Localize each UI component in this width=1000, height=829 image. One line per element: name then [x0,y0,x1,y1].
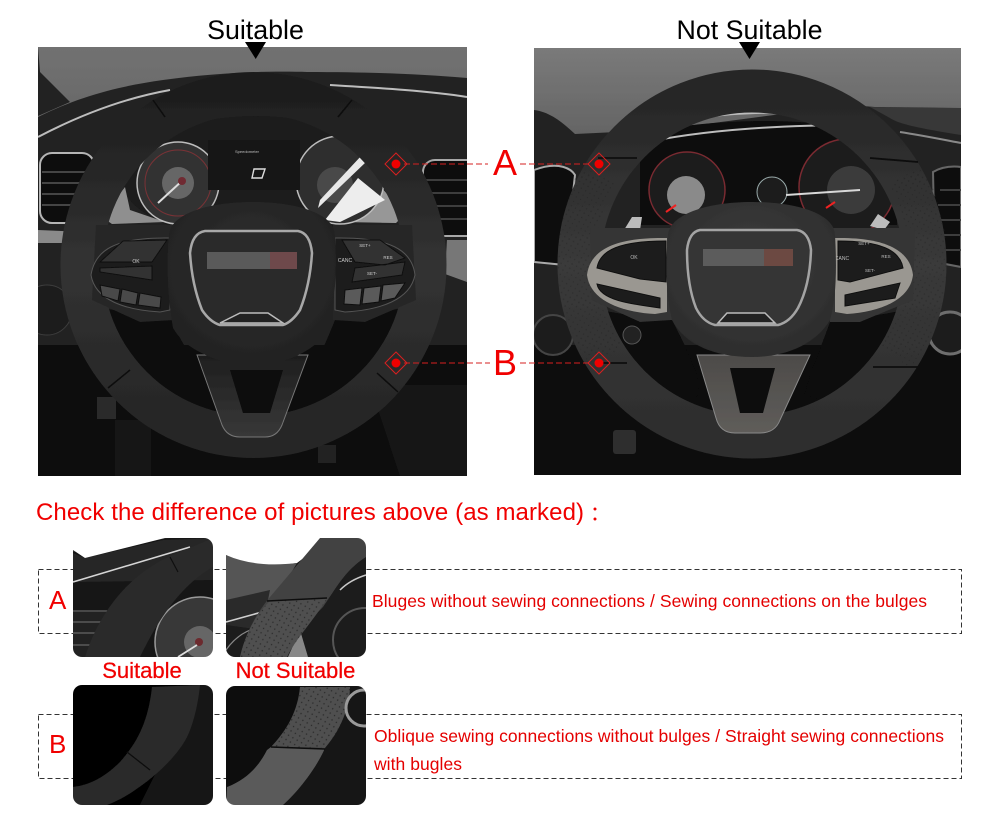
right spoke buttons [335,238,415,312]
footwell openings [600,310,905,401]
right spoke buttons: SET- [367,271,377,276]
row box: A [38,570,962,634]
heading: Suitable: Suitable [207,15,304,45]
airbag hub [666,202,836,357]
right spoke buttons: SET- [865,268,875,273]
left spoke buttons: OK [132,259,140,265]
left spoke buttons [91,238,170,312]
right spoke buttons: SET+ [359,243,371,248]
right spoke buttons: CANC [835,256,849,262]
instruction heading: Check the difference of pictures above (as marked) [36,499,584,526]
digital display [208,150,300,190]
gauge: tachometer [137,142,219,224]
heading: Not Suitable: Not Suitable [677,15,822,45]
badge [687,230,811,325]
panel: suitable steering wheel photo [22,47,483,476]
digital display: Speedometer [235,149,260,154]
left spoke buttons: OK [630,255,638,261]
left spoke buttons [587,238,667,314]
label: B: B [49,729,66,759]
description: row B: Oblique sewing connections without bulges / Straight sewing connections [374,726,944,746]
thumbnail: B suitable [73,685,213,805]
right spoke buttons: RES [383,255,393,260]
right spoke buttons: CANC [338,258,352,264]
callout: marker B connecting both wheels: B [493,342,517,383]
lower spoke [197,355,308,437]
thumbnail: A not suitable [226,538,366,657]
right spoke buttons: RES [881,254,891,259]
callout: marker A connecting both wheels [385,142,610,183]
airbag hub [168,202,336,365]
callout: marker A connecting both wheels: A [493,142,517,183]
gauge: tachometer [649,152,725,228]
instruction heading: ： [590,503,610,525]
right spoke buttons: SET+ [858,241,870,246]
label: A: A [49,585,67,615]
description: row A: Bluges without sewing connections / Sewing connections on the bulges [372,591,927,611]
caption: Not Suitable: Not Suitable [236,658,355,683]
wheel rim [579,91,925,437]
gauge: speedometer [786,139,895,235]
badge [190,231,312,325]
callout: marker B connecting both wheels [385,342,610,383]
row box: B [38,714,962,778]
arrow: Suitable pointer [245,42,266,59]
lower spoke [697,355,810,433]
right spoke buttons [835,238,913,314]
gauge: speedometer [296,136,385,224]
caption: Suitable: Suitable [102,658,182,683]
footwell openings [109,309,398,394]
perforated leather sides [577,175,927,358]
panel: not suitable steering wheel photo [533,48,971,475]
thumbnail: A suitable [73,538,213,657]
arrow: Not Suitable pointer [739,42,760,59]
description: row B: with bugles [373,754,462,774]
thumbnail: B not suitable [226,686,366,805]
wheel rim [82,93,426,437]
gauge: clock [757,177,787,207]
